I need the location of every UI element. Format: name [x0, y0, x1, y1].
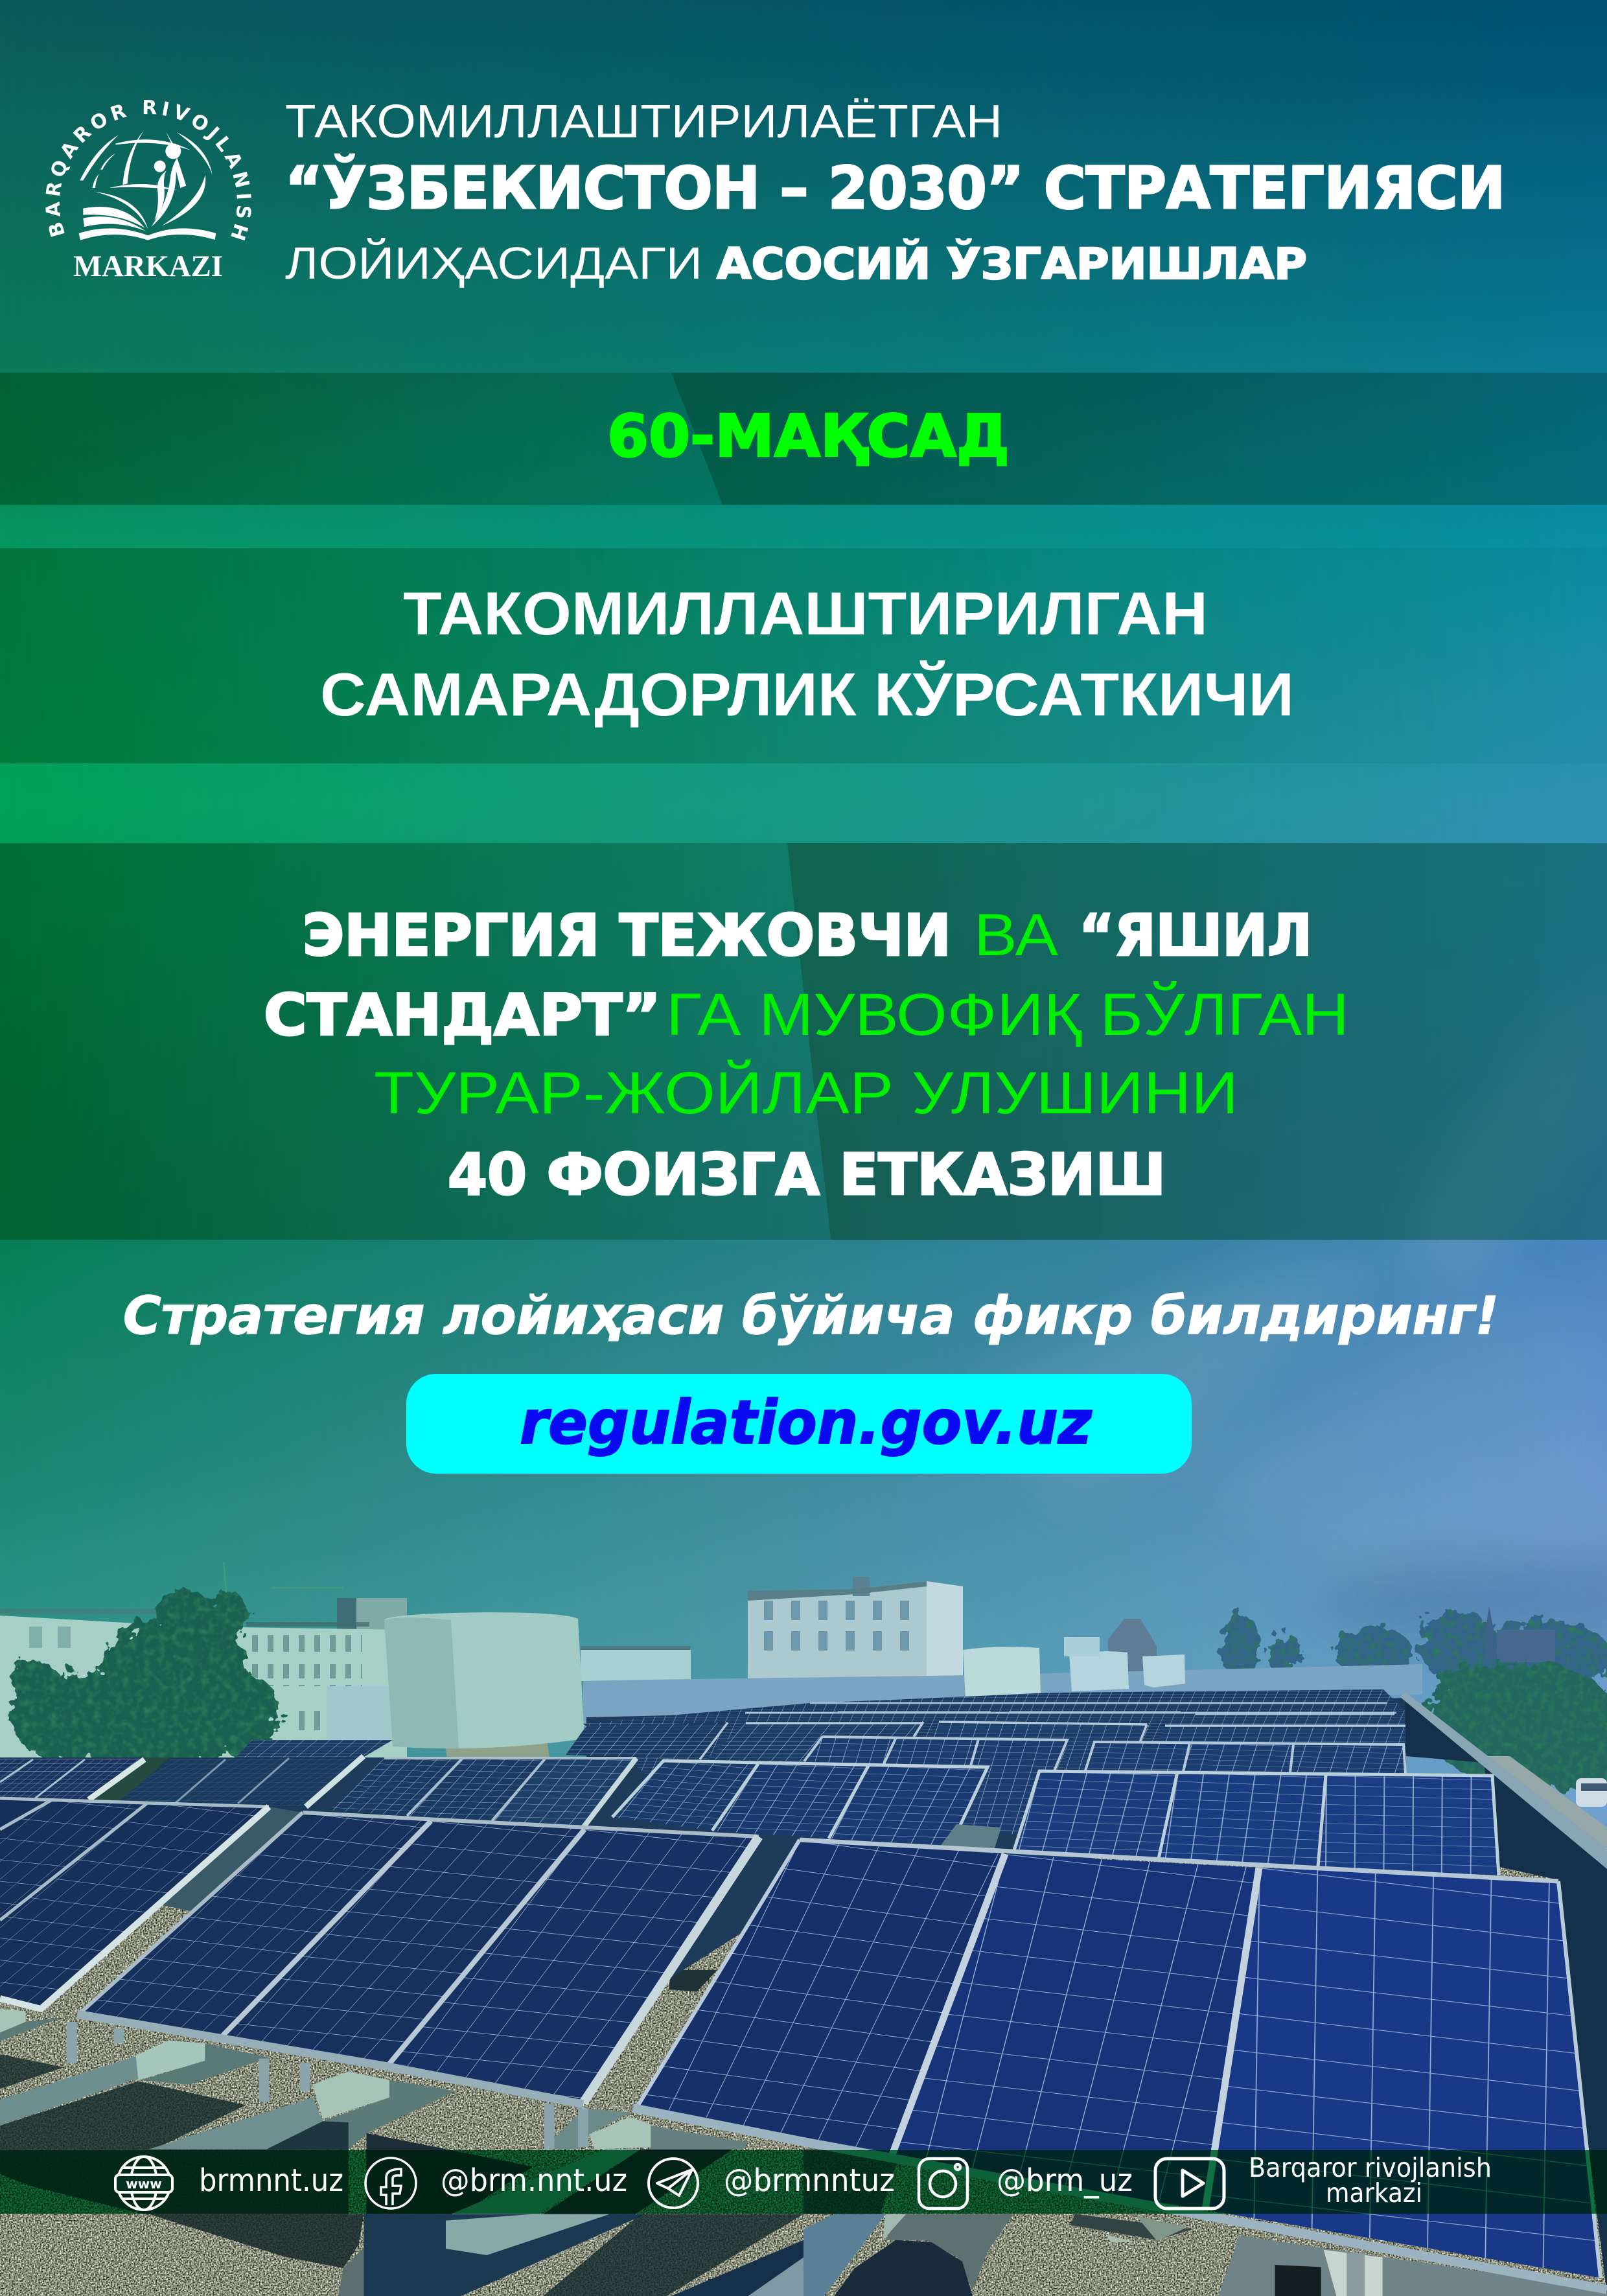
- instagram handle: @brm_uz: [997, 2163, 1133, 2199]
- panels: front-right group: [633, 1840, 1607, 2290]
- target line one: [303, 902, 1312, 969]
- indicator line two: САМАРАДОРЛИК КЎРСАТКИЧИ: [320, 660, 1294, 728]
- target line two: ГА МУВОФИҚ БЎЛГАН: [666, 980, 1349, 1048]
- photo: left building: [0, 1562, 407, 1759]
- call to action text: Стратегия лойиҳаси бўйича фикр билдиринг!: [123, 1286, 1499, 1346]
- header line two: “ЎЗБЕКИСТОН – 2030” СТРАТЕГИЯСИ: [285, 154, 1505, 222]
- target line one: “ЯШИЛ: [1079, 902, 1312, 969]
- logo: [45, 100, 251, 283]
- facebook handle: @brm.nnt.uz: [441, 2163, 627, 2199]
- indicator line one: ТАКОМИЛЛАШТИРИЛГАН: [403, 579, 1208, 647]
- header line three: ЛОЙИҲАСИДАГИ: [285, 237, 702, 288]
- panels: row three: [804, 1737, 1405, 1834]
- photo: gravel roof: [0, 1847, 1607, 2296]
- header line three: АСОСИЙ ЎЗГАРИШЛАР: [717, 238, 1307, 289]
- footer bar: [0, 2150, 1607, 2214]
- channel name: [1249, 2152, 1492, 2209]
- band: target statement: [0, 843, 1607, 1240]
- website button: [406, 1374, 1192, 1474]
- panels: row two: [0, 1756, 1499, 1879]
- photo: back wall: [583, 1664, 1422, 1727]
- photo: central tall building: [748, 1577, 963, 1678]
- background gradient: [0, 0, 1607, 1827]
- sky clouds: [972, 985, 1607, 1652]
- band: goal number: [0, 373, 1607, 505]
- target line one: ВА: [974, 902, 1059, 968]
- panels: far-left group: [0, 1798, 303, 2009]
- icon: website globe: [115, 2157, 172, 2210]
- photo: tree: [10, 1590, 282, 1763]
- panels: far rows: [236, 1689, 1406, 1776]
- target line three: ТУРАР-ЖОЙЛАР УЛУШИНИ: [374, 1059, 1238, 1126]
- logo wordmark: MARKAZI: [73, 249, 223, 283]
- logo emblem: [79, 131, 216, 240]
- header line one: ТАКОМИЛЛАШТИРИЛАЁТГАН: [285, 96, 1002, 148]
- panels: middle-left group: [77, 1813, 759, 2104]
- header: [45, 96, 1505, 289]
- channel name: Barqaror rivojlanish: [1249, 2152, 1492, 2183]
- band: indicator heading: [0, 548, 1607, 763]
- website url: regulation.gov.uz: [520, 1387, 1093, 1457]
- header line three: [285, 237, 1307, 289]
- photo: rooftop solar panels: [0, 1562, 1607, 2296]
- target line two: [264, 980, 1349, 1049]
- photo: rooftop cylinders: [327, 1612, 1185, 1757]
- channel name: markazi: [1326, 2177, 1422, 2209]
- icon: instagram: [919, 2159, 967, 2209]
- logo ring text: BARQAROR RIVOJLANISH: [45, 100, 251, 240]
- photo: concrete blocks and shadows, left: [0, 1970, 804, 2296]
- goal number text: 60-МАҚСАД: [607, 402, 1010, 470]
- icon: telegram: [649, 2159, 698, 2208]
- target line one: ЭНЕРГИЯ ТЕЖОВЧИ: [303, 902, 951, 969]
- icon: facebook: [365, 2158, 416, 2209]
- photo: skyline and right trees: [581, 1606, 1607, 1866]
- target line four: 40 ФОИЗГА ЕТКАЗИШ: [448, 1141, 1166, 1208]
- telegram handle: @brmnntuz: [724, 2163, 895, 2199]
- icon: youtube: [1155, 2159, 1224, 2209]
- website handle: brmnnt.uz: [199, 2163, 343, 2199]
- target line two: СТАНДАРТ”: [264, 982, 661, 1049]
- photo: concrete and stones, right: [804, 2150, 1607, 2296]
- icon: website globe: www: [126, 2176, 162, 2192]
- photo: dark area under panels: [0, 1693, 1607, 2294]
